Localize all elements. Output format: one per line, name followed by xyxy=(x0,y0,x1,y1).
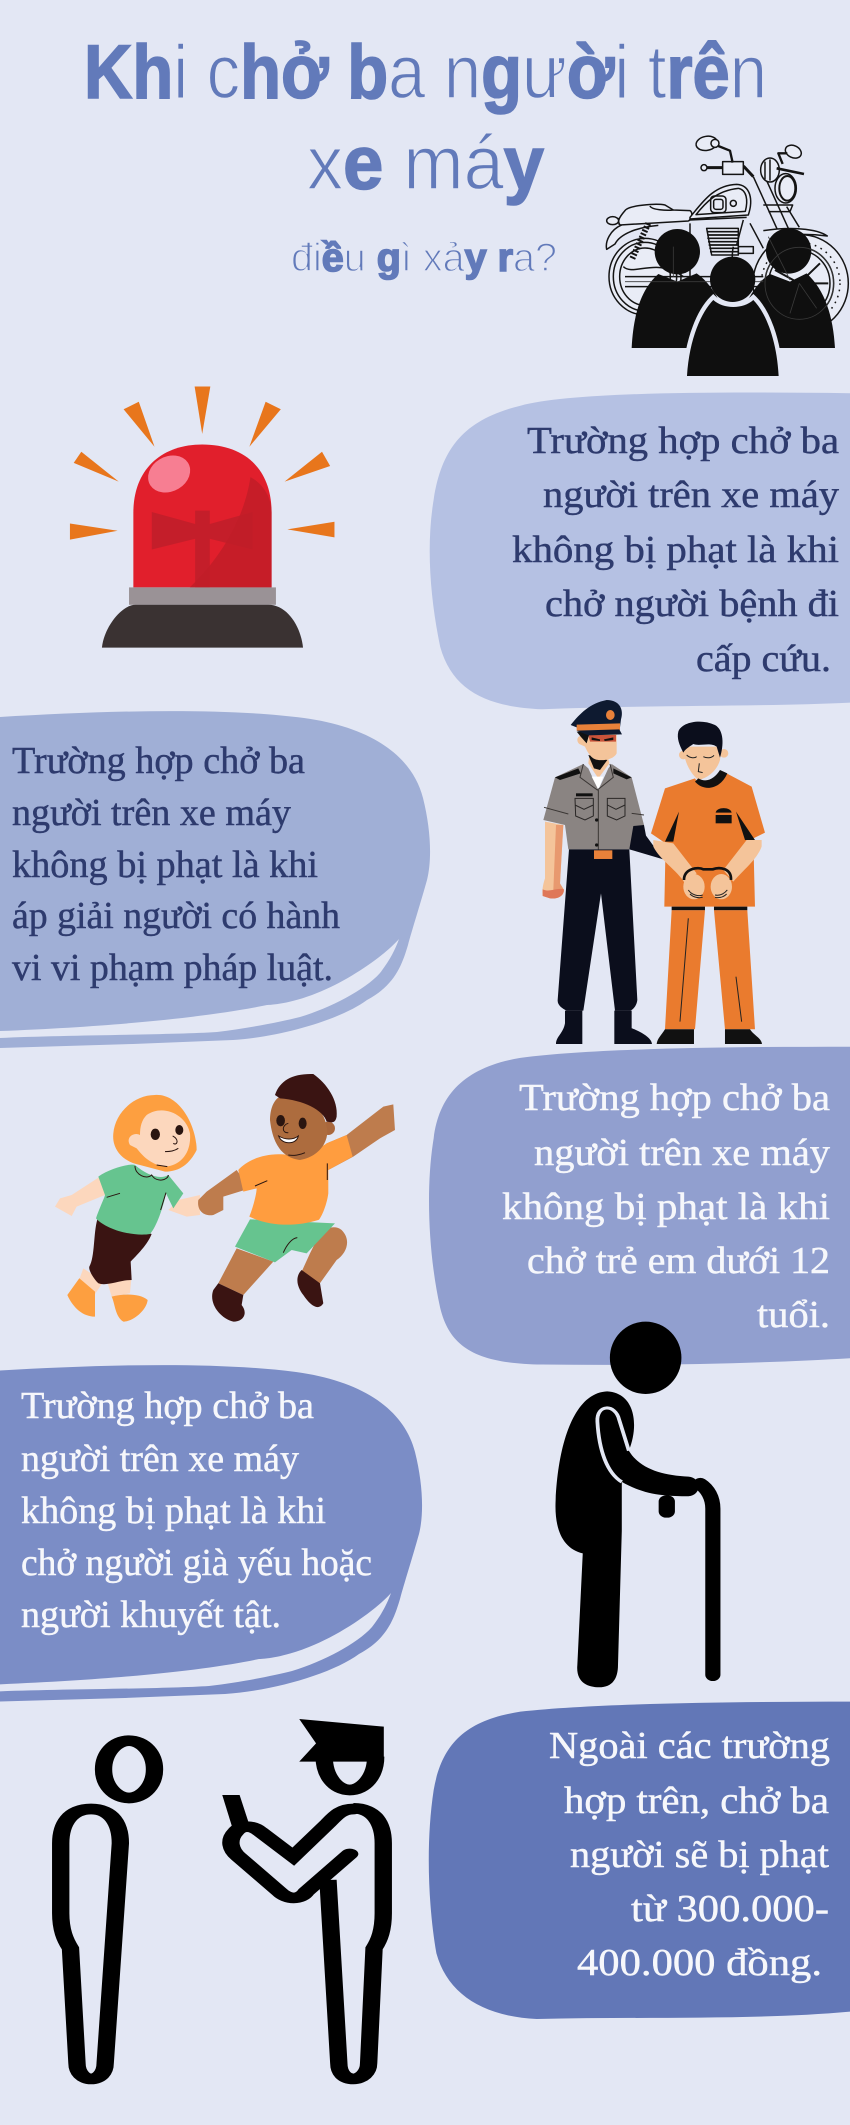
officer outline xyxy=(222,1719,384,2079)
panel: children under 12: người trên xe máy xyxy=(534,1132,830,1174)
panel: fine amount: hợp trên, chở ba xyxy=(564,1780,829,1822)
illustration: two children holding hands xyxy=(55,1074,395,1322)
title: xe máy xyxy=(307,121,544,206)
illustration: police officer and prisoner xyxy=(542,700,765,1044)
person: right xyxy=(733,228,835,348)
panel: escorting offender: không bị phạt là khi xyxy=(12,844,318,886)
icon: elderly person with cane xyxy=(555,1322,713,1687)
motorcycle lines over people xyxy=(625,237,834,319)
panel: elderly or disabled: người trên xe máy xyxy=(21,1438,299,1480)
panel: escorting offender: áp giải người có hành xyxy=(12,895,340,937)
siren dome xyxy=(133,445,272,587)
siren base xyxy=(102,587,303,648)
panel: elderly or disabled: người khuyết tật. xyxy=(21,1594,281,1636)
person: left xyxy=(632,229,733,348)
panel: elderly or disabled: chở người già yếu hoặc xyxy=(21,1542,372,1584)
panel: elderly or disabled: Trường hợp chở ba xyxy=(21,1385,314,1427)
siren rays xyxy=(70,387,334,540)
panel: fine amount: Ngoài các trường xyxy=(549,1725,830,1767)
panel: emergency patient: chở người bệnh đi xyxy=(545,583,839,625)
panel: children under 12: Trường hợp chở ba xyxy=(519,1077,830,1119)
person: center xyxy=(687,257,779,376)
panel: fine amount: từ 300.000- xyxy=(631,1888,829,1930)
title xyxy=(84,30,767,206)
panel: elderly or disabled: không bị phạt là khi xyxy=(21,1490,326,1532)
panel: emergency patient: không bị phạt là khi xyxy=(512,529,839,571)
panel: escorting offender: vi vi phạm pháp luật. xyxy=(12,947,333,989)
officer xyxy=(542,700,663,1044)
panel: emergency patient: cấp cứu. xyxy=(696,638,831,680)
panel: emergency patient: Trường hợp chở ba xyxy=(527,420,839,462)
panel: children under 12: không bị phạt là khi xyxy=(502,1186,830,1228)
title: Khi chở ba người trên xyxy=(84,30,767,115)
panel: emergency patient xyxy=(430,393,850,709)
motorcycle xyxy=(606,135,848,332)
prisoner xyxy=(651,722,765,1044)
girl xyxy=(55,1095,200,1322)
panel: fine amount: người sẽ bị phạt xyxy=(570,1834,829,1876)
subtitle: điều gì xảy ra? xyxy=(291,236,557,280)
panel: escorting offender xyxy=(0,711,430,1048)
icon: citizen and traffic officer outlines xyxy=(61,1719,384,2079)
icon: red siren xyxy=(70,387,334,648)
citizen outline xyxy=(61,1741,154,2079)
panel: children under 12 xyxy=(429,1047,850,1365)
panel: children under 12: tuổi. xyxy=(757,1294,830,1336)
panel: escorting offender: người trên xe máy xyxy=(12,792,291,834)
panel: emergency patient: người trên xe máy xyxy=(543,474,839,516)
panel: fine amount xyxy=(429,1702,850,2019)
icon: motorcycle with three people xyxy=(606,135,848,376)
boy xyxy=(198,1074,395,1322)
panel: elderly or disabled xyxy=(0,1365,422,1702)
panel: fine amount: 400.000 đồng. xyxy=(577,1942,822,1984)
panel: children under 12: chở trẻ em dưới 12 xyxy=(527,1240,830,1282)
panel: escorting offender: Trường hợp chở ba xyxy=(12,740,305,782)
